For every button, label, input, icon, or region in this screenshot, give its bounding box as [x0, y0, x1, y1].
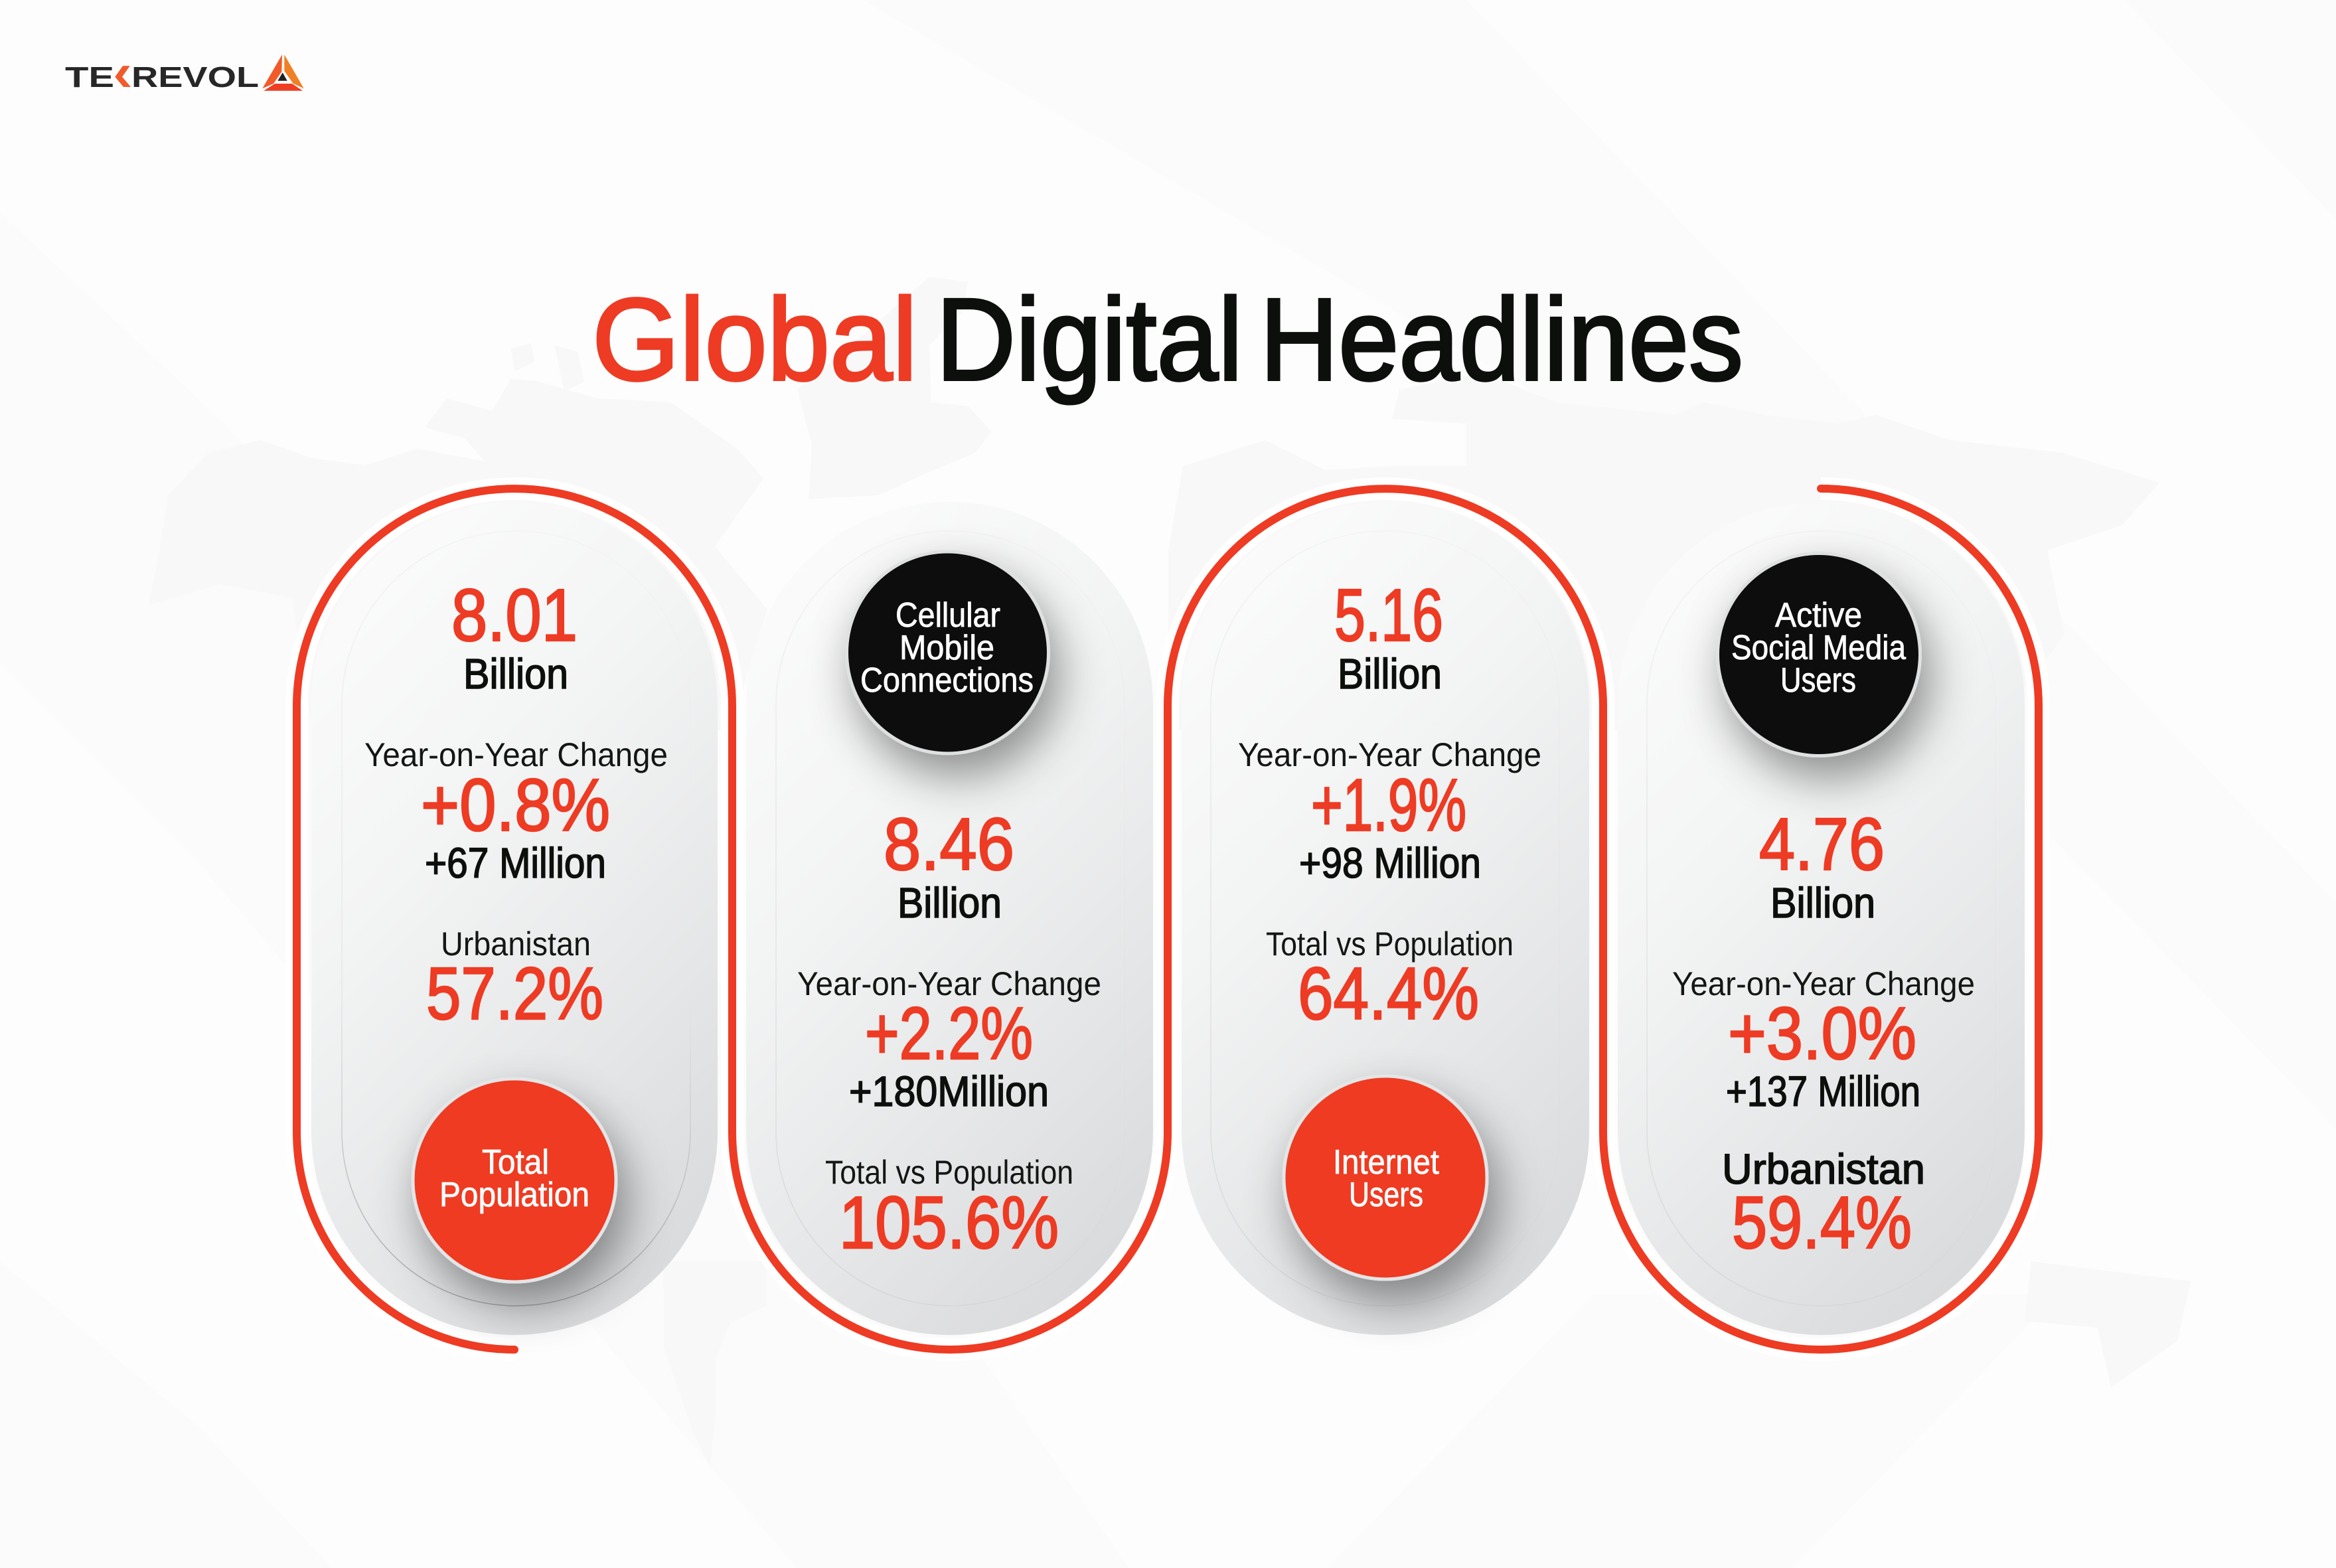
stat: year on year	[1238, 736, 1541, 887]
card background	[1618, 502, 2025, 1335]
stat: urban share: Urbanistan	[1722, 1145, 1925, 1193]
stat: urban share: Urbanistan	[441, 925, 591, 963]
panel: total population	[311, 502, 718, 1335]
badge: active social media users	[1718, 554, 1920, 755]
stat: total: Billion	[463, 650, 568, 698]
stat: total: 8.01	[451, 574, 578, 657]
stat: year on year: +98 Million	[1299, 839, 1481, 887]
badge: total population	[413, 1079, 616, 1282]
panel: internet users	[1182, 502, 1589, 1335]
stat: year on year: +67 Million	[425, 839, 606, 887]
stat: urban share	[1722, 1145, 1925, 1264]
world map	[149, 277, 2191, 1467]
logo: Tekrevol	[65, 54, 304, 94]
badge: internet users: Internet	[1333, 1143, 1439, 1182]
logo: Tekrevol: REVOL	[131, 61, 259, 94]
badge: cellular mobile connections: Connections	[860, 661, 1034, 700]
stat: total: Billion	[1770, 879, 1875, 927]
stat: share of population: 64.4%	[1298, 953, 1479, 1035]
badge: active social media users: Users	[1780, 661, 1856, 700]
title	[592, 275, 1743, 405]
stat: share of population	[825, 1154, 1073, 1264]
card background	[746, 502, 1153, 1335]
stat: share of population	[1266, 925, 1514, 1035]
badge: total population: Total	[482, 1143, 549, 1182]
stat: year on year: +2.2%	[865, 992, 1033, 1075]
stat: total: Billion	[1338, 650, 1442, 698]
stat: total: 5.16	[1334, 574, 1443, 657]
stat: year on year: Year-on-Year Change	[797, 965, 1101, 1002]
badge: active social media users: Social Media	[1731, 629, 1906, 667]
stat: year on year: +1.9%	[1311, 764, 1466, 846]
stat: total: 4.76	[1759, 803, 1885, 886]
stat: year on year	[797, 965, 1101, 1115]
title: Headlines	[1260, 275, 1743, 405]
stat: year on year	[364, 736, 668, 887]
stat: year on year: Year-on-Year Change	[1672, 965, 1975, 1002]
stat: year on year: +0.8%	[421, 764, 610, 846]
stat: total	[451, 574, 578, 698]
stat: urban share: 59.4%	[1732, 1182, 1912, 1264]
stat: year on year	[1672, 965, 1975, 1115]
badge: internet users: Users	[1349, 1176, 1423, 1214]
badge: cellular mobile connections: Cellular	[895, 596, 1000, 635]
stat: total	[1759, 803, 1885, 927]
card background	[311, 502, 718, 1335]
badge: active social media users: Active	[1775, 596, 1862, 635]
badge: internet users	[1284, 1076, 1487, 1279]
stat: year on year: +3.0%	[1728, 992, 1916, 1075]
stat: urban share	[426, 925, 603, 1035]
badge: cellular mobile connections: Mobile	[899, 629, 994, 667]
stat: total	[1334, 574, 1443, 698]
title: Digital	[936, 275, 1243, 405]
stat: total: 8.46	[884, 803, 1014, 886]
stat: total: Billion	[897, 879, 1002, 927]
panel: cellular mobile connections	[746, 502, 1153, 1335]
stat: total	[884, 803, 1014, 927]
badge: cellular mobile connections	[847, 552, 1049, 753]
stat: share of population: Total vs Population	[825, 1154, 1073, 1191]
stat: urban share: 57.2%	[426, 953, 603, 1035]
panel: active social media users	[1618, 502, 2025, 1335]
continuous red outline	[297, 489, 2039, 1350]
stat: year on year: +180Million	[849, 1067, 1049, 1115]
stat: share of population: Total vs Population	[1266, 925, 1514, 963]
badge: total population: Population	[439, 1176, 589, 1214]
stat: year on year: Year-on-Year Change	[1238, 736, 1541, 773]
stat: share of population: 105.6%	[839, 1182, 1059, 1264]
stat: year on year: Year-on-Year Change	[364, 736, 668, 773]
stat: year on year: +137 Million	[1726, 1067, 1920, 1115]
title: Global	[592, 275, 917, 405]
logo: Tekrevol: TE	[65, 61, 114, 94]
card background	[1182, 502, 1589, 1335]
